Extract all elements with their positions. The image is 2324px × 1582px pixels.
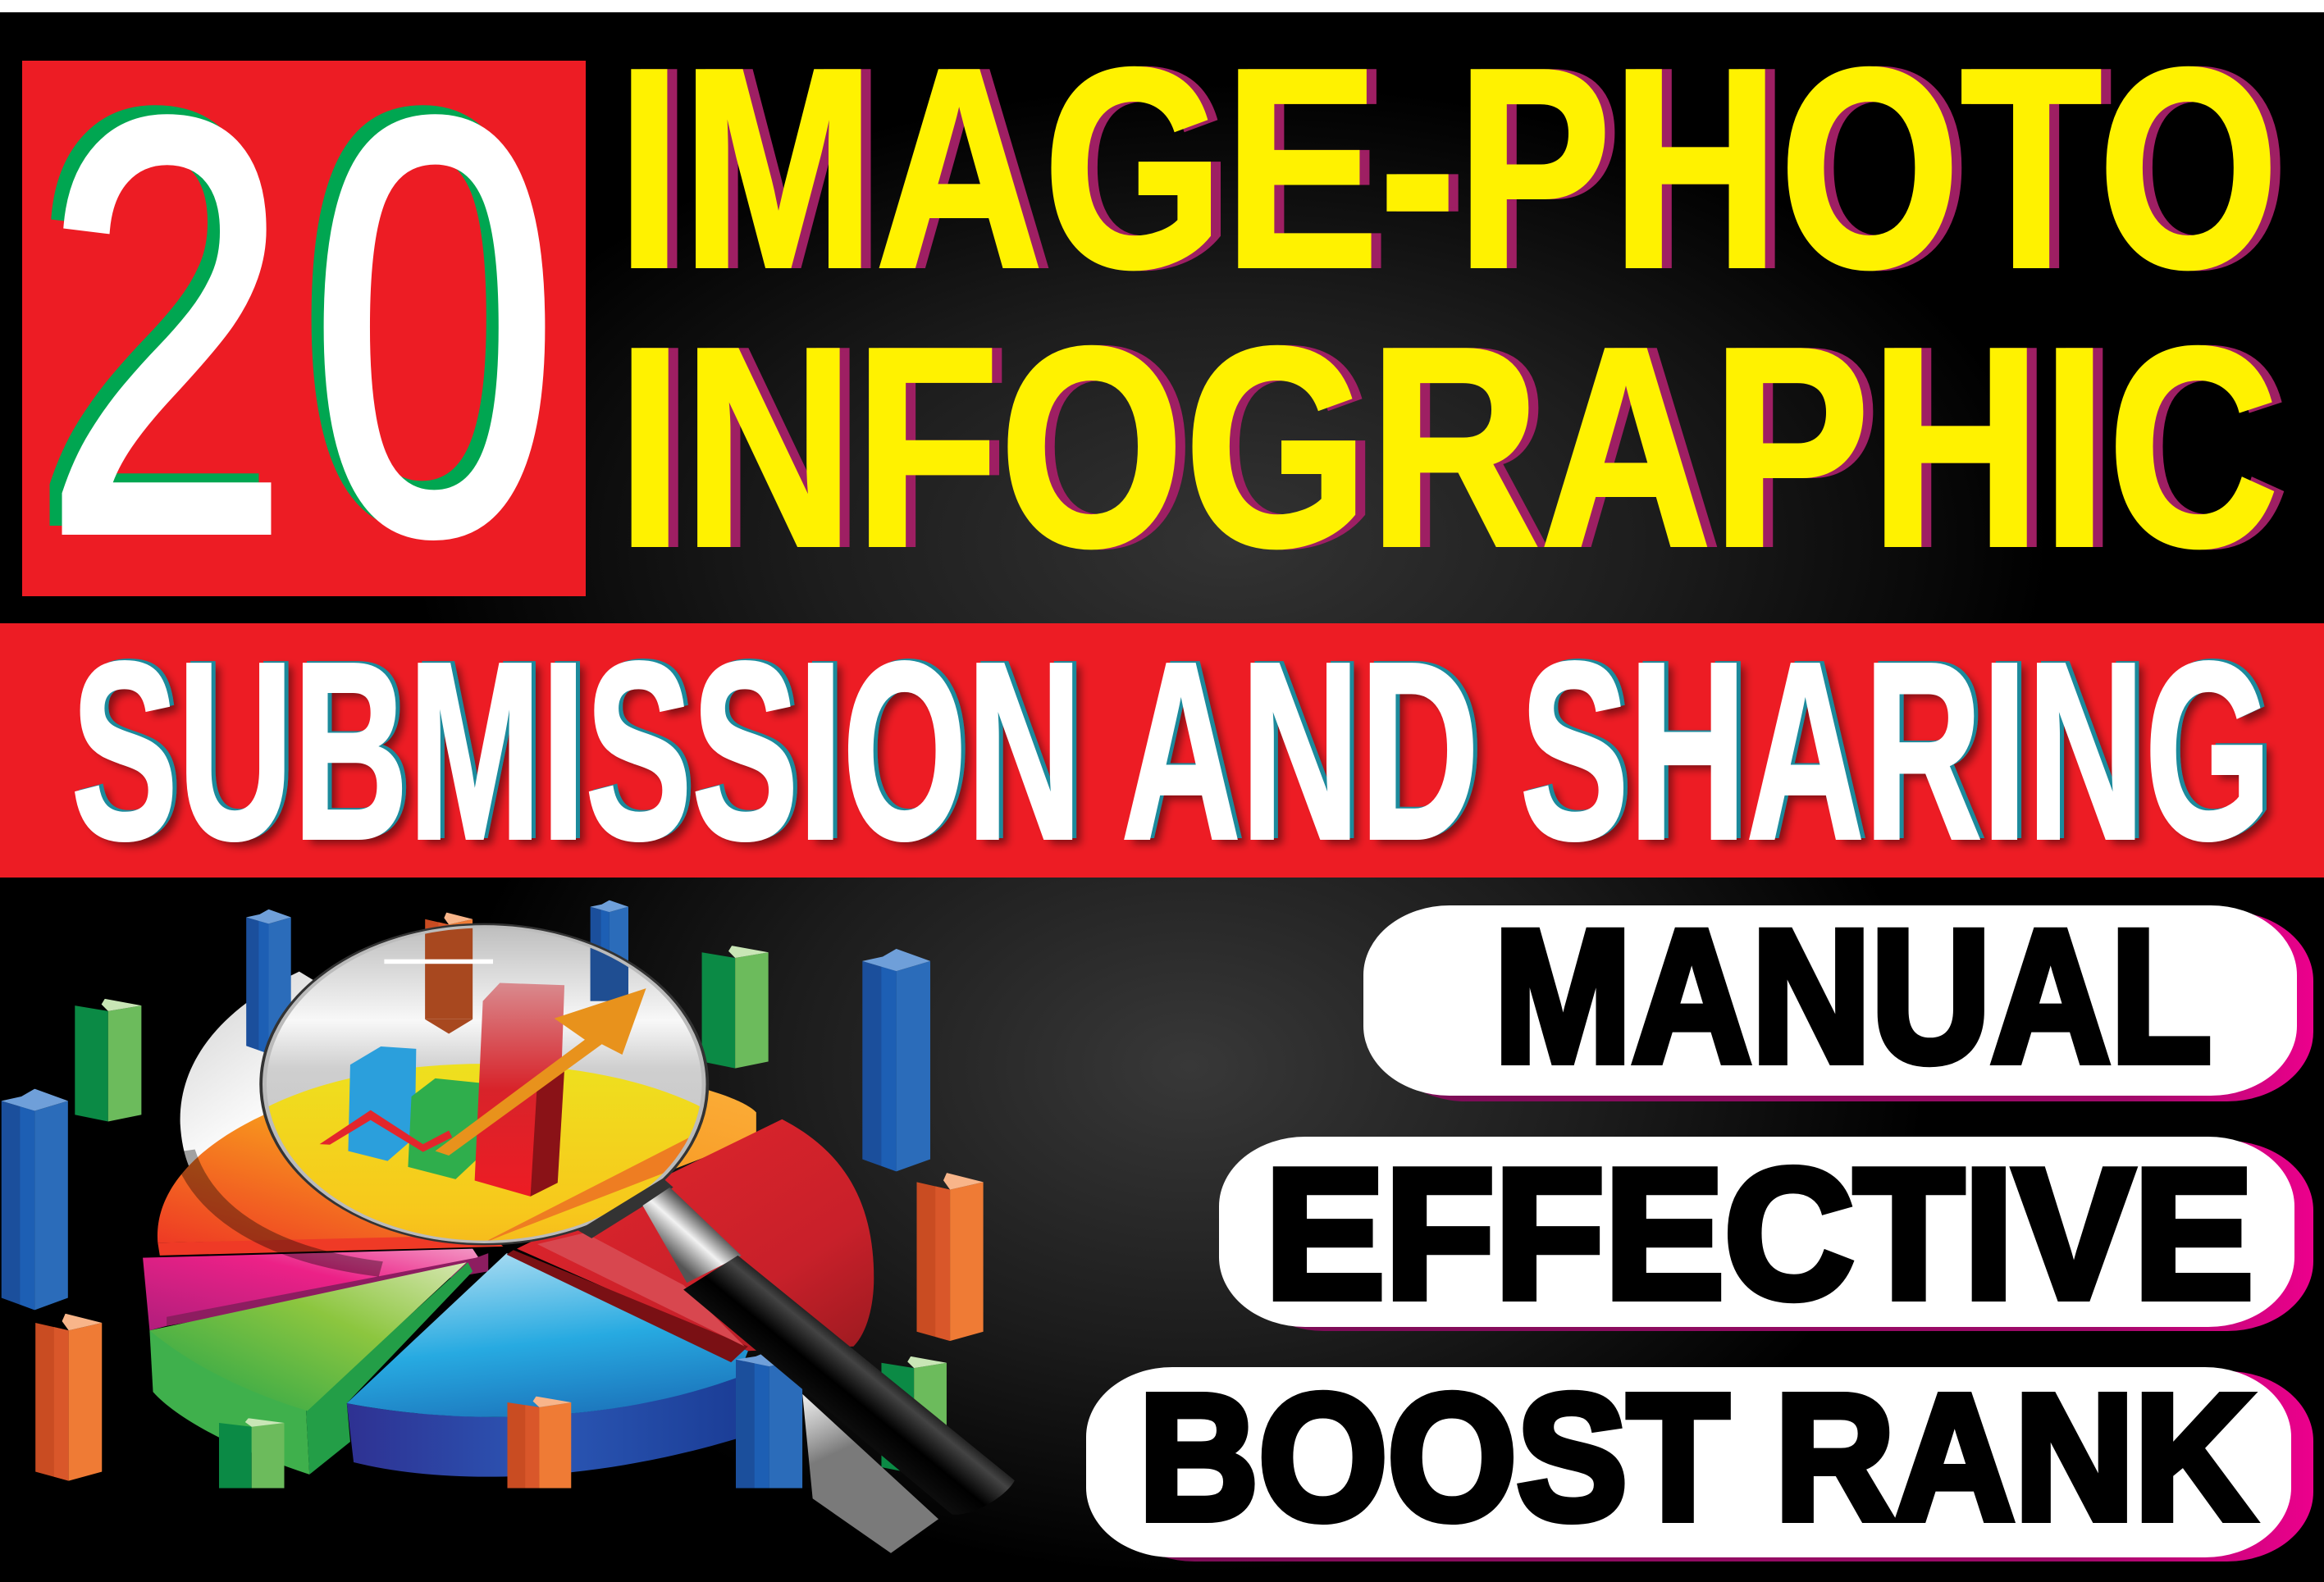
cover below front bars <box>204 1489 816 1511</box>
badge: red box with number 20: 0 <box>297 0 547 647</box>
badge: red box with number 20 <box>22 0 586 656</box>
lens: green bar <box>408 1078 479 1179</box>
banner: submission and sharing <box>0 609 2324 892</box>
lens rim <box>261 924 707 1244</box>
handle shadow <box>802 1394 938 1553</box>
handle metal collar <box>642 1188 742 1283</box>
badge: red box with number 20: 2 <box>43 0 290 656</box>
lens: orange arrow <box>436 988 646 1156</box>
pie slice: blue top <box>347 1253 748 1417</box>
bars behind the pie <box>2 900 984 1481</box>
handle neck <box>578 1179 673 1238</box>
badge: red box with number 20: 0 <box>309 0 559 656</box>
pie slice: green top <box>149 1262 467 1411</box>
pie slice: green side <box>149 1330 309 1475</box>
pill: boost rank: BOOST RANK <box>1139 1358 2254 1557</box>
banner: submission and sharing: AND <box>1121 610 1479 892</box>
pill: effective: EFFECTIVE <box>1265 1130 2253 1337</box>
orange slice lower strip <box>158 1235 503 1256</box>
badge: red box with number 20: 2 <box>30 0 278 647</box>
bars in front of the pie <box>219 1351 802 1506</box>
illustration: pie chart with magnifying glass <box>2 900 1015 1553</box>
red reflection under the neck <box>537 1233 745 1347</box>
handle <box>683 1256 1015 1515</box>
lens contents <box>267 928 702 1243</box>
pie slice: blue side <box>347 1376 742 1477</box>
pill: manual: MANUAL <box>1494 891 2212 1101</box>
magenta slice dark edge <box>167 1253 488 1326</box>
lens: highlight <box>384 960 493 964</box>
banner: submission and sharing: SUBMISSION <box>75 609 1086 891</box>
lens: red bar <box>475 982 564 1197</box>
pie slice: orange <box>158 1069 756 1242</box>
lens: red trend line <box>320 1110 452 1152</box>
banner: submission and sharing: SUBMISSION <box>71 610 1082 892</box>
lens: blue bar <box>348 1046 416 1161</box>
dark wedge between red and blue <box>507 1250 748 1362</box>
banner: submission and sharing: AND <box>1125 609 1483 891</box>
pie slice: red <box>517 1119 874 1351</box>
white back plate <box>180 972 490 1197</box>
pie slice: magenta <box>143 1249 486 1330</box>
green slice inner face <box>306 1262 473 1475</box>
lens shadow arc <box>184 1151 381 1270</box>
